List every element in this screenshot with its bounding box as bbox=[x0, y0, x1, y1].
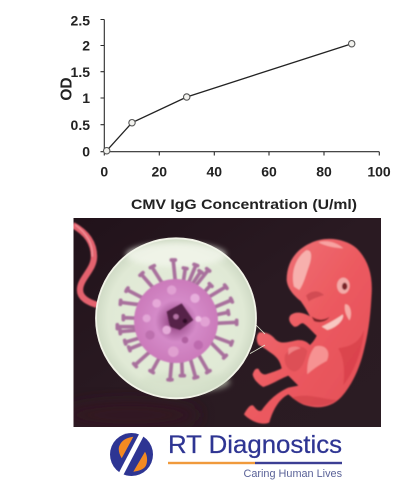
chart axes bbox=[100, 20, 379, 156]
y axis tick labels bbox=[71, 12, 90, 160]
x axis tick labels: 0 bbox=[100, 164, 108, 180]
x axis tick labels: 60 bbox=[261, 164, 277, 180]
virus particle bbox=[117, 260, 237, 380]
x axis title: CMV IgG Concentration (U/ml) bbox=[131, 196, 357, 212]
virus body bbox=[134, 279, 218, 363]
y axis tick labels: 0 bbox=[82, 144, 90, 160]
logo wordmark: RT Diagnostics bbox=[168, 431, 342, 459]
y axis tick labels: 2.5 bbox=[71, 12, 90, 28]
fetus eye and face shading bbox=[306, 291, 324, 302]
y axis tick labels: 1 bbox=[82, 90, 90, 106]
y axis tick labels: 2 bbox=[82, 38, 90, 54]
connector lines from lens to cord bbox=[250, 325, 265, 354]
fetus ear bbox=[337, 278, 350, 294]
x axis tick labels bbox=[100, 164, 391, 180]
magnifying lens circle bbox=[96, 238, 256, 398]
x axis tick labels: 40 bbox=[207, 164, 222, 180]
fetus bbox=[244, 239, 372, 424]
fetus head highlight bbox=[293, 250, 311, 290]
virus surface texture bbox=[143, 285, 210, 357]
fetus neck and body highlights bbox=[322, 314, 343, 330]
dark background bbox=[73, 218, 381, 427]
umbilical cord left bbox=[73, 225, 97, 305]
logo emblem bbox=[110, 432, 153, 476]
infographic canvas bbox=[60, 16, 390, 480]
logo divider line bbox=[168, 462, 342, 464]
x axis tick labels: 20 bbox=[152, 164, 167, 180]
line chart: OD vs CMV IgG concentration bbox=[58, 12, 391, 212]
RT Diagnostics logo bbox=[110, 431, 342, 480]
x axis tick labels: 80 bbox=[316, 164, 332, 180]
data points bbox=[104, 40, 355, 154]
data line bbox=[107, 44, 352, 151]
y axis tick labels: 0.5 bbox=[71, 117, 90, 133]
photo panel: CMV virus and fetus bbox=[60, 218, 381, 429]
logo tagline: Caring Human Lives bbox=[244, 468, 342, 480]
y axis title: OD bbox=[58, 77, 76, 101]
y axis tick labels: 1.5 bbox=[71, 64, 90, 80]
virus spikes bbox=[117, 260, 237, 380]
x axis tick labels: 100 bbox=[367, 164, 391, 180]
